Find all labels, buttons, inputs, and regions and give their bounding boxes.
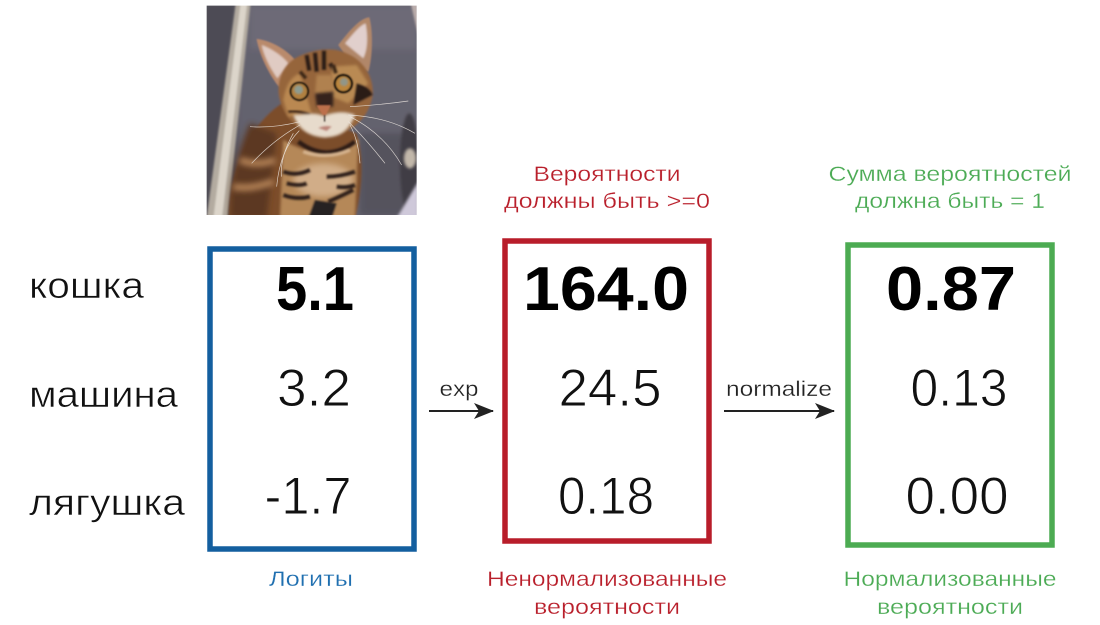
panel: normalized probabilities [848,245,1052,545]
panel: logits [210,249,414,549]
caption: unnormalized probabilities [487,568,727,619]
row label: кошка: кошка [29,265,144,306]
caption: logits: Логиты [269,568,353,591]
row label: лягушка: лягушка [29,482,185,523]
arrow: exp [429,378,493,411]
note: probabilities must sum to one: Сумма вероятностей [828,163,1072,186]
value: unnormalized cat: 164.0 [523,255,689,324]
cat photo [203,2,420,218]
value: logit car: 3.2 [277,359,351,418]
note: probabilities must be non-negative: Вероятности [534,163,680,186]
caption: unnormalized probabilities: Ненормализованные [487,568,727,591]
value: unnormalized frog: 0.18 [558,467,654,526]
note: probabilities must sum to one: должна быть = 1 [855,190,1045,213]
note: probabilities must be non-negative [504,163,710,213]
arrow label: normalize: normalize [726,378,832,401]
value: logit frog: -1.7 [264,467,352,526]
row label: машина: машина [29,374,178,415]
caption: unnormalized probabilities: вероятности [534,596,680,619]
note: probabilities must be non-negative: должны быть >=0 [504,190,710,213]
cat eyes [289,74,353,101]
value: normalized car: 0.13 [910,359,1008,418]
caption: normalized probabilities: Нормализованные [844,568,1056,591]
caption: normalized probabilities [844,568,1056,619]
arrow: normalize [724,378,834,411]
panel: unnormalized probabilities [505,241,709,541]
value: unnormalized car: 24.5 [558,359,662,418]
caption: normalized probabilities: вероятности [877,596,1023,619]
note: probabilities must sum to one [828,163,1072,213]
value: normalized frog: 0.00 [906,467,1008,526]
arrow label: exp: exp [440,378,478,401]
value: logit cat: 5.1 [276,255,354,324]
value: normalized cat: 0.87 [886,255,1016,324]
